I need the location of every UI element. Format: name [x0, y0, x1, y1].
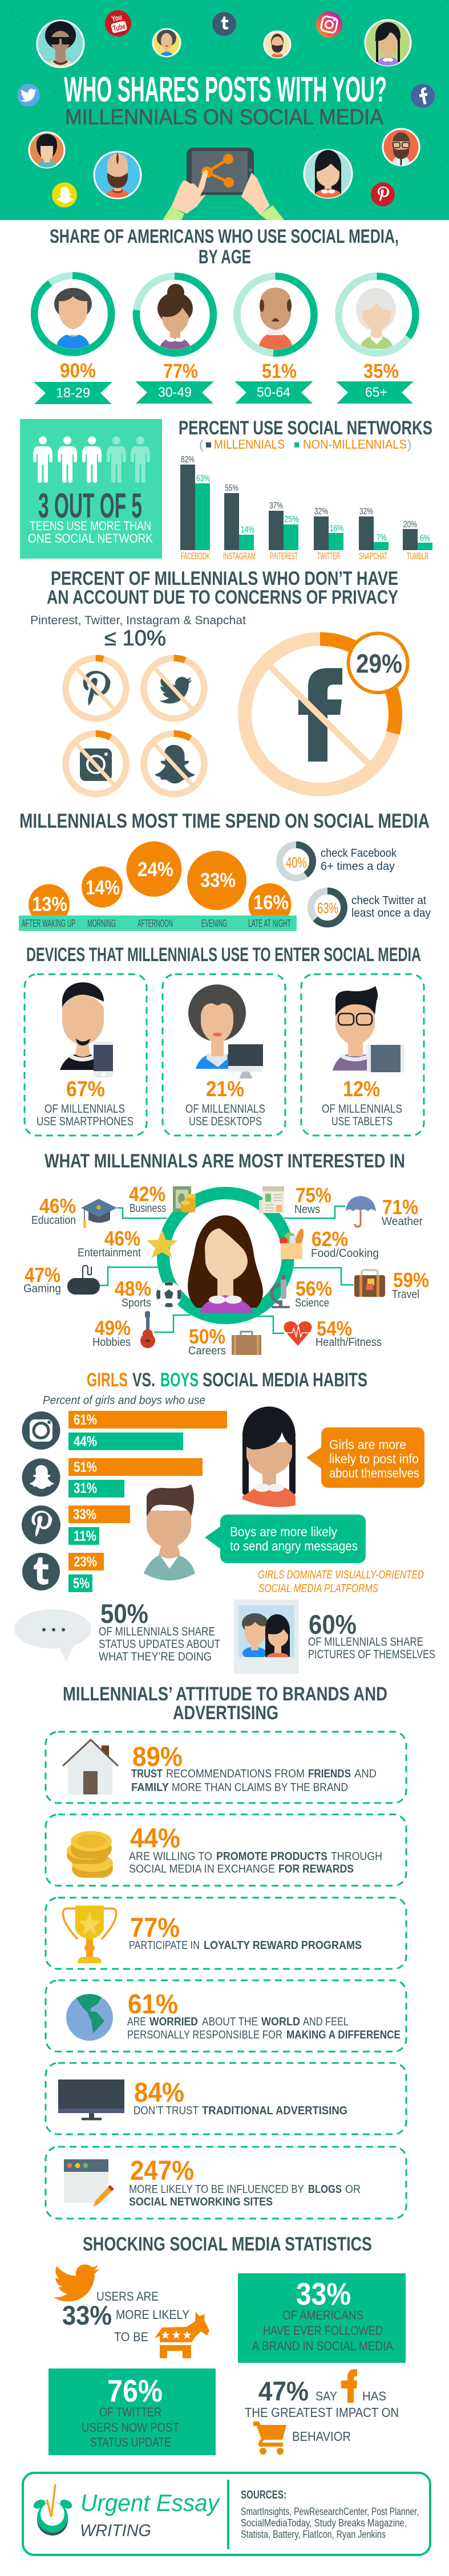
bar chart: 37% — [269, 501, 283, 511]
item: weather — [346, 1195, 423, 1228]
bar chart: 82% — [181, 455, 195, 465]
donut 30-49 — [136, 276, 213, 353]
stat text: OF MILLENNIALS — [185, 1102, 265, 1116]
avatar: woman with bob — [29, 132, 64, 174]
panel: status update: OF TWITTER — [99, 2405, 161, 2419]
icon: shopping cart — [253, 2422, 286, 2455]
heading: share of americans — [50, 226, 399, 268]
stat text: OF MILLENNIALS — [45, 1102, 125, 1116]
callout: girls: Girls are more — [329, 1437, 406, 1452]
stat: facebook impact: THE GREATEST IMPACT ON — [245, 2405, 399, 2420]
item: science — [272, 1275, 332, 1309]
bar chart: 20% — [403, 520, 417, 530]
bar chart: TUMBLR — [407, 551, 428, 561]
icon: snapchat — [52, 182, 77, 207]
no-sign: pinterest — [66, 658, 126, 718]
icon: browser and pencil — [64, 2159, 114, 2207]
item: sports — [115, 1281, 181, 1309]
title — [64, 70, 387, 129]
stat text: USE TABLETS — [331, 1115, 393, 1128]
item: food: 62% — [312, 1227, 348, 1251]
avatar: man with mohawk — [94, 152, 141, 205]
stat: check twitter: least once a day — [351, 907, 431, 919]
panel: loyalty — [46, 1898, 406, 1969]
item: entertainment: Entertainment — [78, 1247, 141, 1259]
percent labels: 90% — [60, 360, 96, 382]
item: careers: 50% — [189, 1325, 225, 1348]
icon: tv — [58, 2079, 124, 2121]
heading: girls vs boys — [87, 1369, 367, 1391]
percent labels: 51% — [262, 360, 297, 382]
item: hobbies: 49% — [95, 1316, 131, 1340]
bars: 61% — [74, 1412, 97, 1428]
icon: house — [63, 1740, 118, 1794]
age ribbons: 18-29 — [56, 385, 90, 401]
logo — [32, 2484, 221, 2540]
icon: orange twitter bird — [54, 2264, 99, 2301]
item: science: Science — [295, 1297, 329, 1309]
panel: desktops — [163, 974, 285, 1136]
icon: pinterest — [22, 1505, 60, 1544]
person with monitor — [188, 984, 263, 1079]
bar chart: TWITTER — [317, 551, 340, 561]
callout: 29%: 29% — [356, 649, 402, 678]
item: hobbies — [92, 1311, 155, 1349]
panel: trust: TRUST — [131, 1768, 163, 1780]
time of day bar: AFTERNOON — [137, 918, 173, 929]
note: girls dominate — [258, 1569, 424, 1595]
item: education — [31, 1194, 117, 1228]
avatar: woman with braids — [365, 20, 411, 71]
panel: privacy networks — [30, 614, 407, 794]
panel: world — [46, 1980, 406, 2052]
age ribbons — [34, 381, 414, 404]
sources: Statista, Battery, FlatIcon, Ryan Jenkins — [241, 2529, 386, 2540]
icon: globe — [66, 1993, 113, 2041]
panel: status update: 76% — [107, 2373, 163, 2408]
panel: world: WORRIED — [149, 2016, 198, 2028]
icon: youtube: You — [111, 12, 123, 23]
panel: rewards: SOCIAL MEDIA IN EXCHANGE — [129, 1863, 275, 1875]
heading: privacy — [47, 568, 398, 608]
no-sign: facebook 29% — [245, 633, 407, 790]
illustration: boy — [144, 1484, 195, 1580]
stat text: USE DESKTOPS — [189, 1115, 262, 1128]
panel: usage by age donuts — [34, 276, 415, 404]
panel: followed a brand: 33% — [296, 2276, 351, 2312]
icon: instagram — [316, 11, 342, 38]
stat: twitter users democrats: TO BE — [114, 2330, 148, 2344]
panel: rewards: FOR REWARDS — [278, 1863, 354, 1875]
bar chart: 7% — [377, 533, 387, 543]
item: entertainment — [78, 1227, 177, 1259]
stat text: 67% — [66, 1077, 105, 1101]
item: news: News — [294, 1203, 320, 1216]
panel: trust: RECOMMENDATIONS FROM — [166, 1768, 305, 1780]
stat: twitter users democrats: USERS ARE — [96, 2289, 159, 2304]
item: food: Food/Cooking — [311, 1247, 379, 1260]
chart subtitle: Percent of girls and boys who use — [43, 1394, 205, 1407]
icon: tumblr — [212, 12, 236, 36]
bar chart: INSTAGRAM — [223, 551, 256, 561]
item: business — [129, 1182, 196, 1215]
panel: rewards: 44% — [130, 1824, 180, 1854]
icon: twitter — [17, 84, 40, 107]
bar chart: 25% — [284, 515, 299, 524]
bar chart: 32% — [359, 507, 373, 516]
panel: loyalty: LOYALTY REWARD PROGRAMS — [204, 1939, 362, 1952]
item: news — [259, 1183, 331, 1216]
item: health: 54% — [317, 1317, 352, 1340]
legend: ( — [199, 437, 204, 451]
item: education: Education — [31, 1214, 76, 1227]
bars: 5% — [73, 1576, 90, 1592]
icon: instagram — [22, 1411, 60, 1450]
item: science: 56% — [296, 1277, 332, 1300]
stat text: 12% — [343, 1077, 380, 1101]
sources: SOURCES: — [241, 2489, 286, 2501]
note: girls dominate: SOCIAL MEDIA PLATFORMS — [258, 1582, 379, 1595]
stat text: 21% — [206, 1077, 244, 1101]
item: gaming: 47% — [25, 1263, 60, 1287]
bars: 11% — [74, 1528, 96, 1544]
stat: check twitter — [311, 891, 431, 924]
item: gaming: Gaming — [23, 1283, 61, 1295]
panel: smartphones — [25, 974, 147, 1136]
sources — [241, 2489, 419, 2540]
bar chart: 16% — [330, 524, 343, 534]
stat text — [28, 486, 153, 546]
item: health — [284, 1317, 382, 1349]
person with tablet — [333, 986, 404, 1072]
icon: trophy — [63, 1906, 116, 1963]
icon: pinterest — [371, 182, 395, 206]
panel: rewards — [46, 1814, 406, 1886]
panel: advertising: DON’T TRUST — [134, 2105, 199, 2117]
stat: pictures: 60% — [309, 1609, 357, 1639]
item: food — [280, 1227, 379, 1260]
bars: 33% — [73, 1507, 96, 1523]
time of day bar: AFTER WAKING UP — [22, 918, 75, 929]
stat: facebook impact: HAS — [362, 2389, 386, 2403]
panel: time of day bubbles: 16% — [253, 892, 289, 914]
item: sports: Sports — [122, 1297, 151, 1309]
item: sports: 48% — [115, 1277, 151, 1300]
panel: time of day bubbles: 24% — [137, 858, 173, 881]
stat: facebook impact: 47% — [258, 2376, 309, 2406]
callout: boys: to send angry messages — [230, 1539, 358, 1553]
stat: check facebook: 40% — [286, 854, 307, 871]
panel: advertising — [46, 2063, 406, 2134]
item: weather: 71% — [382, 1195, 418, 1219]
panel: world: MAKING A DIFFERENCE — [286, 2029, 401, 2041]
bars: 23% — [74, 1554, 97, 1570]
item: entertainment: 46% — [104, 1227, 140, 1250]
stat: pictures: OF MILLENNIALS SHARE — [308, 1635, 423, 1649]
stat: check facebook: 6+ times a day — [321, 860, 395, 873]
item: education: 46% — [39, 1194, 76, 1218]
heading: brands: ADVERTISING — [173, 1702, 278, 1724]
donut 18-29 — [34, 276, 111, 352]
bar chart: 14% — [241, 525, 254, 535]
panel: world: WORLD — [261, 2016, 300, 2028]
panel: world: AND FEEL — [303, 2016, 349, 2028]
panel: world: PERSONALLY RESPONSIBLE FOR — [127, 2029, 282, 2041]
no-sign: instagram — [66, 734, 126, 794]
footer panel — [23, 2473, 430, 2555]
illustration: girl — [242, 1407, 296, 1507]
callout: girls: likely to post info — [329, 1451, 419, 1466]
panel: tablets — [301, 974, 424, 1136]
stat text — [322, 1077, 402, 1128]
panel: rewards: THROUGH — [331, 1850, 382, 1863]
bars: 51% — [74, 1459, 97, 1475]
panel: trust: 89% — [132, 1742, 183, 1772]
panel: time of day bubbles: 33% — [200, 869, 236, 892]
stat: facebook impact: BEHAVIOR — [292, 2429, 351, 2444]
bars: 44% — [74, 1434, 97, 1450]
stat: check twitter: 63% — [317, 900, 338, 917]
heading: girls vs boys: GIRLS — [87, 1369, 128, 1391]
panel: followed a brand — [238, 2273, 406, 2363]
panel: status update: STATUS UPDATE — [90, 2435, 171, 2449]
percent labels: 77% — [163, 360, 198, 382]
item: news: 75% — [296, 1183, 331, 1207]
panel: advertising: TRADITIONAL ADVERTISING — [202, 2105, 347, 2117]
legend: MILLENNIALS — [214, 437, 285, 451]
item: gaming — [23, 1263, 100, 1295]
no-sign: snapchat — [144, 734, 204, 794]
small network label: ≤ 10% — [104, 626, 166, 650]
no-sign: twitter — [144, 658, 204, 718]
age ribbons: 65+ — [365, 385, 387, 400]
icon: youtube: Tube — [112, 21, 126, 33]
icon: photo — [234, 1600, 299, 1674]
icon: democrat donkey — [155, 2312, 209, 2358]
item: weather: Weather — [382, 1215, 423, 1228]
heading: brands — [63, 1683, 387, 1724]
heading: share of americans: BY AGE — [199, 246, 251, 268]
stat: check twitter: check Twitter at — [351, 894, 426, 907]
stat: facebook impact: SAY — [315, 2389, 337, 2403]
stat text: TEENS USE MORE THAN — [30, 519, 151, 533]
small network label: Pinterest, Twitter, Instagram & Snapchat — [30, 614, 246, 627]
heading: girls vs boys: BOYS — [160, 1369, 199, 1391]
bar chart: 63% — [196, 474, 210, 483]
callout: 29% — [348, 633, 407, 693]
panel: rewards: ARE WILLING TO — [129, 1850, 212, 1863]
donut 65+ — [339, 276, 415, 353]
stat: twitter users democrats — [54, 2264, 209, 2358]
bar chart: FACEBOOK — [181, 551, 210, 561]
panel: status update — [48, 2369, 216, 2455]
stat: status updates — [14, 1598, 220, 1663]
bar chart: 6% — [420, 534, 430, 543]
stat text: OF MILLENNIALS — [322, 1102, 402, 1116]
icon: youtube — [105, 10, 131, 36]
panel: interests hub — [23, 1182, 429, 1357]
item: careers — [188, 1325, 261, 1357]
bar chart: SNAPCHAT — [359, 551, 387, 561]
stat: status updates: 50% — [100, 1598, 148, 1629]
time of day bar: LATE AT NIGHT — [248, 918, 291, 929]
donut 50-64 — [237, 276, 314, 353]
callout: boys: Boys are more likely — [230, 1524, 337, 1539]
stat: twitter users democrats: MORE LIKELY — [116, 2308, 189, 2322]
panel: blogs: SOCIAL NETWORKING SITES — [129, 2196, 273, 2208]
bars: 31% — [74, 1480, 97, 1496]
chart: girls and boys usage — [22, 1394, 227, 1592]
central woman — [188, 1215, 263, 1313]
logo: WRITING — [80, 2521, 151, 2540]
icon: coins — [67, 1831, 113, 1878]
panel: blogs: OR — [345, 2183, 361, 2196]
stat: status updates: STATUS UPDATES ABOUT — [99, 1638, 220, 1651]
panel: loyalty: 77% — [130, 1913, 180, 1943]
panel: 3 out of 5 teens — [20, 419, 162, 559]
stat: status updates: WHAT THEY’RE DOING — [99, 1650, 212, 1663]
panel: status update: USERS NOW POST — [82, 2420, 179, 2435]
panel: blogs: MORE LIKELY TO BE INFLUENCED BY — [129, 2183, 304, 2196]
avatar: man with glasses — [383, 129, 419, 170]
panel: world: ARE — [127, 2016, 146, 2028]
callout: boys — [205, 1515, 366, 1563]
heading: shocking statistics: SHOCKING SOCIAL MEDIA STATISTICS — [83, 2233, 372, 2255]
bar chart: 55% — [225, 483, 238, 493]
icon: five people — [33, 437, 150, 483]
item: careers: Careers — [188, 1345, 226, 1357]
panel: blogs — [46, 2147, 406, 2219]
heading: girls vs boys: VS. — [132, 1369, 155, 1391]
panel: percent use social networks — [179, 417, 432, 561]
panel: time of day bubbles: 13% — [32, 893, 67, 915]
percent labels: 35% — [363, 360, 399, 382]
heading: girls vs boys: SOCIAL MEDIA HABITS — [203, 1369, 367, 1391]
time of day bar: EVENING — [201, 918, 227, 929]
stat text — [37, 1077, 134, 1128]
stat text — [185, 1077, 265, 1128]
item: business: 42% — [129, 1182, 165, 1206]
callout: girls: about themselves — [329, 1466, 419, 1480]
panel: world: 61% — [128, 1989, 178, 2020]
panel: world: ABOUT THE — [202, 2016, 258, 2028]
panel: trust: AND — [354, 1768, 377, 1780]
panel: trust — [46, 1732, 406, 1803]
icon: facebook — [411, 84, 435, 108]
small network label — [30, 614, 246, 650]
stat: status updates: OF MILLENNIALS SHARE — [99, 1625, 215, 1638]
time of day bar — [19, 915, 297, 931]
person with phone — [60, 982, 113, 1077]
panel: time of day bubbles: 14% — [86, 877, 120, 899]
panel: followed a brand: OF AMERICANS — [282, 2308, 363, 2322]
panel: advertising: 84% — [134, 2078, 184, 2108]
panel: rewards: PROMOTE PRODUCTS — [216, 1850, 327, 1863]
panel: followed a brand: HAVE EVER FOLLOWED — [263, 2323, 383, 2338]
bars — [68, 1411, 227, 1592]
legend — [199, 437, 411, 451]
age ribbons: 50-64 — [257, 385, 290, 400]
illustration: tablet with share icon — [163, 148, 284, 220]
avatar: small woman — [153, 29, 180, 61]
panel: blogs: BLOGS — [308, 2183, 342, 2196]
item: travel — [354, 1268, 429, 1301]
logo: Urgent Essay — [80, 2489, 221, 2516]
legend: NON-MILLENNIALS — [303, 437, 407, 451]
stat: pictures — [234, 1600, 435, 1674]
bar chart: PINTEREST — [270, 551, 298, 561]
panel: trust: MORE THAN CLAIMS BY THE BRAND — [172, 1781, 348, 1794]
callout: girls — [306, 1427, 424, 1488]
stat: facebook impact — [245, 2369, 399, 2455]
item: hobbies: Hobbies — [92, 1336, 131, 1349]
item: business: Business — [130, 1202, 166, 1215]
panel: time of day bubbles — [19, 841, 297, 931]
icon: alarm clock — [32, 2484, 74, 2536]
panel: trust: FRIENDS — [308, 1768, 351, 1780]
legend: ) — [407, 437, 411, 451]
icon: snapchat — [22, 1458, 60, 1497]
avatar: afro with sunglasses — [37, 19, 84, 68]
sources: SocialMediaToday, Study Breaks Magazine, — [241, 2517, 407, 2529]
panel: blogs: 247% — [130, 2156, 194, 2186]
panel: loyalty: PARTICIPATE IN — [129, 1939, 200, 1952]
avatar: woman with long hair — [304, 150, 352, 202]
avatar: small bearded man — [264, 31, 290, 63]
stat text: ONE SOCIAL NETWORK — [28, 531, 153, 546]
item: travel: 59% — [393, 1268, 429, 1292]
icon: orange f — [341, 2369, 357, 2403]
panel: trust: FAMILY — [131, 1781, 169, 1794]
title: MILLENNIALS ON SOCIAL MEDIA — [65, 105, 384, 129]
bar chart: 32% — [314, 507, 328, 516]
panel: followed a brand: A BRAND IN SOCIAL MEDIA — [252, 2339, 393, 2353]
stat: twitter users democrats: 33% — [62, 2300, 112, 2330]
header banner — [0, 0, 449, 220]
time of day bar: MORNING — [87, 918, 116, 929]
stat: check facebook — [280, 845, 397, 878]
stat text: USE SMARTPHONES — [37, 1115, 134, 1128]
hands holding tablet — [163, 170, 284, 220]
stat text: 3 OUT OF 5 — [38, 486, 142, 525]
item: health: Health/Fitness — [315, 1336, 382, 1349]
bar chart — [180, 455, 432, 561]
item: travel: Travel — [392, 1288, 419, 1301]
icon: tumblr — [22, 1553, 60, 1590]
stat: check facebook: check Facebook — [321, 847, 397, 860]
age ribbons: 30-49 — [158, 385, 192, 400]
icon: speech bubble — [14, 1609, 91, 1662]
percent labels — [60, 360, 399, 382]
